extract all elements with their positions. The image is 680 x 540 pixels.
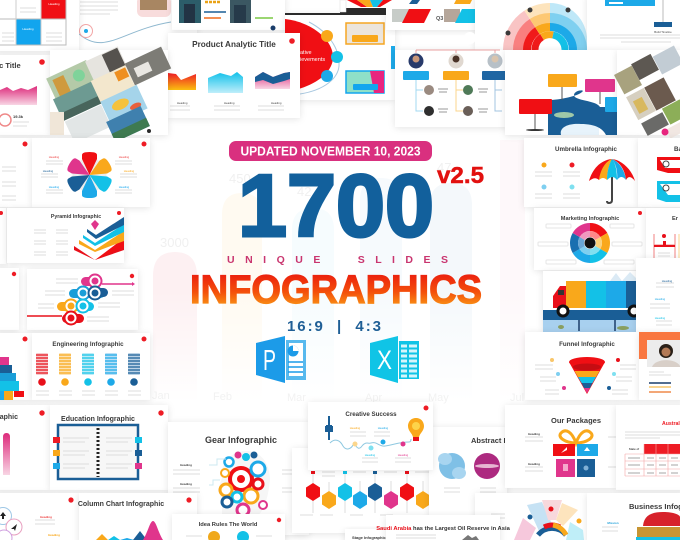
panel: flower infographic: Heading bbox=[49, 185, 60, 189]
panel: column chart infographic bbox=[78, 493, 197, 540]
panel: creative success bbox=[308, 402, 433, 470]
update pill bbox=[229, 141, 432, 161]
panel: education infographic bbox=[50, 405, 168, 490]
panel: business infographic bbox=[587, 493, 680, 540]
icon: excel: X bbox=[377, 345, 392, 375]
panel: gear infographic: Heading bbox=[180, 463, 192, 467]
panel: umbrella infographic bbox=[524, 138, 638, 207]
heading: Education Infographic bbox=[61, 416, 135, 423]
panel: left edge process bbox=[0, 268, 19, 330]
heading: Column Chart Infographic bbox=[78, 501, 164, 508]
panel: tilted photo collage bbox=[46, 46, 171, 143]
heading: Our Packages bbox=[551, 416, 601, 425]
ghost bar chart behind title: 47 bbox=[437, 160, 451, 175]
panel: our packages: Heading bbox=[528, 432, 540, 436]
panel: circles slide bbox=[0, 493, 79, 540]
chain bbox=[27, 274, 135, 324]
panel: truck infographic bbox=[543, 271, 639, 332]
panel: quarter parallelograms slide bbox=[386, 0, 498, 30]
panel: numbered table slide: Heading bbox=[22, 27, 34, 31]
panel: flower infographic: Heading bbox=[119, 185, 130, 189]
heading: Marketing Infographic bbox=[561, 216, 619, 222]
panel: area title slide: 19.3k bbox=[13, 114, 24, 119]
panel: profile slide bbox=[639, 332, 680, 400]
panel: abstract infographic: Abstract In bbox=[471, 436, 511, 445]
heading: Gear Infographic bbox=[205, 435, 277, 445]
hexagons bbox=[306, 483, 430, 509]
rainbow rings bbox=[503, 3, 587, 50]
funnel bbox=[569, 357, 605, 394]
blue abstract shape bbox=[439, 453, 465, 479]
panel: river road slide bbox=[505, 50, 618, 135]
light bulb bbox=[408, 418, 424, 441]
ghost bar chart behind title: Mar bbox=[287, 392, 306, 404]
panel: flower infographic: Heading bbox=[124, 169, 135, 173]
stack bbox=[643, 512, 680, 526]
panel: gear infographic bbox=[168, 422, 309, 535]
panel: numbered table slide bbox=[0, 0, 79, 51]
panel: numbered table slide: Heading bbox=[48, 2, 60, 6]
panel: hexagon chain slide bbox=[292, 448, 434, 533]
panel: pyramid left edge bbox=[0, 208, 6, 264]
panel: product analytic slide: Heading bbox=[271, 101, 282, 105]
power plug bbox=[327, 416, 331, 440]
heading: Pyramid Infographic bbox=[51, 214, 101, 220]
panel: gear infographic: Heading bbox=[180, 482, 192, 486]
panel: rainbow gear slide bbox=[475, 0, 587, 69]
gear head bbox=[218, 451, 270, 516]
ghost bar chart behind title: Jul bbox=[510, 392, 524, 404]
panel: process chain infographic bbox=[27, 269, 138, 330]
panel: flower infographic: Heading bbox=[119, 155, 130, 159]
panel: business infographic: Mission bbox=[607, 521, 619, 525]
signs bbox=[519, 99, 552, 114]
panel: text list slide: Heading bbox=[662, 279, 673, 283]
panel: creative success: Heading bbox=[350, 426, 361, 430]
panel: stage infographic bbox=[345, 529, 405, 540]
panel: creative success: Heading bbox=[398, 453, 409, 457]
ghost bar chart behind title: 42 bbox=[297, 184, 311, 199]
striped columns bbox=[36, 353, 140, 375]
road bbox=[543, 310, 637, 320]
ghost bar chart behind title: Jan bbox=[152, 390, 170, 402]
panel: australia table bbox=[616, 405, 680, 490]
panel: product analytic slide: Heading bbox=[177, 101, 188, 105]
gift icon bbox=[553, 431, 598, 477]
umbrella bbox=[589, 159, 635, 203]
update pill: UPDATED NOVEMBER 10, 2023 bbox=[240, 144, 420, 158]
fan top with black bar bbox=[340, 0, 392, 15]
big number 1700: 1700 bbox=[238, 156, 434, 255]
panel: area title slide bbox=[0, 55, 50, 135]
truck bbox=[553, 272, 637, 308]
ratios: 16:9 | 4:3 bbox=[287, 318, 381, 335]
panel: build timeline slide: Build Timeline bbox=[654, 30, 672, 34]
peaks bbox=[96, 534, 108, 540]
panel: text list slide: Heading bbox=[655, 297, 666, 301]
ghost bar chart behind title: May bbox=[428, 392, 449, 404]
panel: quarter parallelograms slide: Q4 bbox=[486, 16, 494, 22]
icon: powerpoint: P bbox=[263, 345, 276, 377]
panel: product analytic slide bbox=[168, 33, 300, 118]
table bbox=[644, 444, 680, 454]
panel: stage infographic: Stage Infographic bbox=[352, 535, 387, 540]
avatars bbox=[408, 54, 424, 68]
panel: idea rules the world bbox=[172, 514, 285, 540]
panel: australia table: State of bbox=[629, 447, 639, 451]
panel: block pyramid left slide bbox=[0, 333, 32, 400]
name boxes bbox=[403, 71, 429, 80]
heading: Engineering Infographic bbox=[52, 341, 124, 348]
panel: bar left slide bbox=[0, 405, 50, 490]
icon: excel bbox=[370, 336, 419, 383]
panel: fan infographic bbox=[475, 493, 587, 540]
panel: our packages: Heading bbox=[528, 462, 540, 466]
area chart: blue bbox=[208, 72, 243, 93]
panel: abstract infographic bbox=[429, 427, 511, 517]
panel: funnel infographic bbox=[525, 332, 639, 400]
panel: text list slide: Heading bbox=[655, 316, 666, 320]
notebook bbox=[53, 425, 142, 479]
panel: flower infographic left edge bbox=[0, 138, 32, 207]
flower icon bbox=[66, 152, 113, 198]
panel: creative success: Heading bbox=[378, 426, 389, 430]
area chart: pink navy bbox=[255, 72, 290, 89]
gear bbox=[531, 31, 569, 69]
panel: build timeline slide bbox=[587, 0, 680, 51]
panel: creative achievements slide: ievements bbox=[300, 57, 325, 63]
panel: circles slide: Heading bbox=[48, 533, 60, 537]
panel: er slide: Er bbox=[672, 216, 679, 222]
infographics title: INFOGRAPHICS bbox=[190, 268, 482, 312]
pink bar bbox=[3, 433, 10, 475]
subtitle: U N I Q U E S L I D E S bbox=[227, 254, 448, 266]
panel: hexagon photo collage bbox=[614, 46, 680, 139]
panel: engineering infographic bbox=[32, 333, 150, 400]
panel: creative success: Heading bbox=[365, 453, 376, 457]
heading: Creative Success bbox=[345, 411, 397, 418]
ghost bar chart behind title: 3000 bbox=[160, 235, 189, 250]
panel: er slide bbox=[646, 208, 680, 270]
heading: Product Analytic Title bbox=[192, 40, 276, 49]
heading: Idea Rules The World bbox=[199, 522, 258, 528]
panel: our packages bbox=[505, 405, 617, 488]
colour wheel bbox=[568, 221, 612, 265]
panel: flower infographic: Heading bbox=[49, 155, 60, 159]
river bbox=[548, 110, 599, 135]
ghost bar chart behind title: Apr bbox=[365, 392, 382, 404]
photos bbox=[46, 46, 171, 143]
panel: quarter parallelograms slide: Q3 bbox=[436, 16, 443, 22]
panel: ba slide bbox=[638, 138, 680, 207]
fan bbox=[514, 500, 584, 540]
panel: flower infographic bbox=[32, 138, 150, 207]
ghost bar chart behind title bbox=[150, 140, 530, 404]
heading: Funnel Infographic bbox=[559, 341, 615, 348]
panel: creative achievements slide: ative bbox=[300, 50, 312, 56]
panel: creative achievements slide bbox=[285, 13, 395, 100]
panel: people slide bbox=[172, 0, 285, 30]
area chart: red yellow bbox=[168, 73, 196, 90]
heading: Umbrella Infographic bbox=[555, 146, 617, 153]
ghost bar chart behind title: Feb bbox=[213, 391, 232, 403]
version label: v2.5 bbox=[437, 162, 484, 188]
panel: curve timeline slide bbox=[70, 0, 197, 50]
panel: text list slide bbox=[636, 258, 680, 332]
panel: pyramid infographic bbox=[7, 208, 124, 263]
panel: circles slide: Heading bbox=[40, 515, 52, 519]
stacked pyramid bbox=[74, 217, 124, 260]
panel: saudi arabia slide bbox=[376, 515, 511, 540]
purple abstract shape bbox=[474, 453, 500, 479]
panel: marketing infographic bbox=[534, 208, 646, 270]
panel: product analytic slide: Heading bbox=[224, 101, 235, 105]
ghost bar chart behind title: 450 bbox=[229, 171, 251, 186]
heading: Saudi Arabia has the Largest Oil Reserve in Asia bbox=[376, 526, 511, 532]
icon: powerpoint bbox=[256, 336, 306, 383]
panel: org chart slide bbox=[395, 32, 507, 127]
panel: flower infographic: Heading bbox=[43, 169, 54, 173]
